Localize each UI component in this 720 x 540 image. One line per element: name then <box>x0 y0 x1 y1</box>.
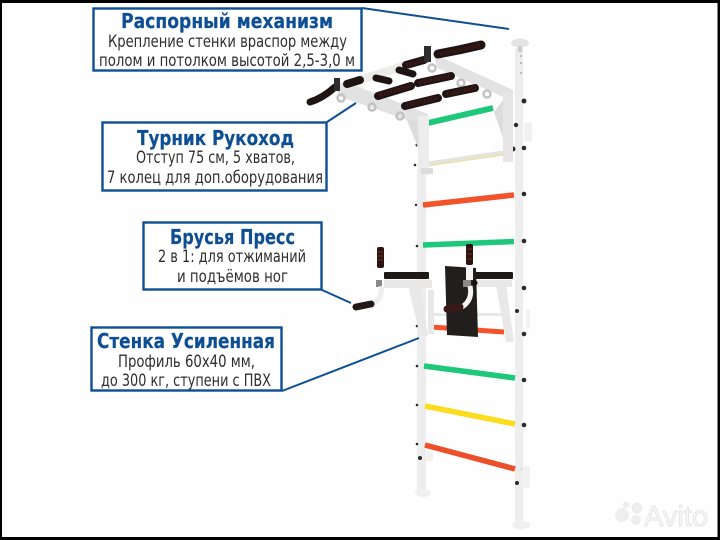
callout: spacer mechanism: Крепление стенки враспор между <box>108 32 347 51</box>
black grips <box>310 45 481 106</box>
left vertical handle <box>356 247 384 307</box>
wall brackets <box>425 122 532 488</box>
callout: pull-up bar: 7 колец для доп.оборудования <box>107 168 323 187</box>
callout: dip bars: и подъёмов ног <box>177 267 288 286</box>
right vertical handle <box>447 244 478 309</box>
callout: pull-up bar <box>102 122 326 190</box>
callout: pull-up bar: Отступ 75 см, 5 хватов, <box>136 148 295 167</box>
left upright <box>415 170 431 497</box>
clamps <box>334 46 431 91</box>
watermark: Avito: Avito <box>644 501 708 533</box>
red grip stripes <box>379 45 480 105</box>
press pad <box>445 266 478 337</box>
right upright <box>512 48 530 530</box>
watermark: Avito <box>616 501 708 533</box>
callout: dip bars: Брусья Пресс <box>170 225 295 249</box>
rungs <box>423 108 515 469</box>
callout: reinforced wall: Стенка Усиленная <box>97 329 275 353</box>
callout: dip bars <box>144 222 322 290</box>
callout: spacer mechanism <box>94 8 362 70</box>
callout: reinforced wall <box>92 328 282 390</box>
seats <box>384 272 513 279</box>
callout: reinforced wall: Профиль 60х40 мм, <box>118 352 255 371</box>
leader lines <box>282 8 509 391</box>
wall bolts <box>414 98 526 485</box>
pull-up bar <box>310 45 513 175</box>
callout: reinforced wall: до 300 кг, ступени с ПВХ <box>101 371 271 390</box>
wall bars <box>414 38 532 530</box>
frame <box>336 54 513 175</box>
callout: dip bars: 2 в 1: для отжиманий <box>158 247 306 266</box>
callout: spacer mechanism: полом и потолком высотой 2,5-3,0 м <box>99 51 355 70</box>
callout: spacer mechanism: Распорный механизм <box>121 9 333 33</box>
callout: pull-up bar: Турник Рукоход <box>137 126 294 150</box>
spacer mechanism cap <box>511 38 529 74</box>
rings <box>338 64 490 120</box>
frame <box>384 280 514 342</box>
dip bars and press pad <box>356 244 514 342</box>
